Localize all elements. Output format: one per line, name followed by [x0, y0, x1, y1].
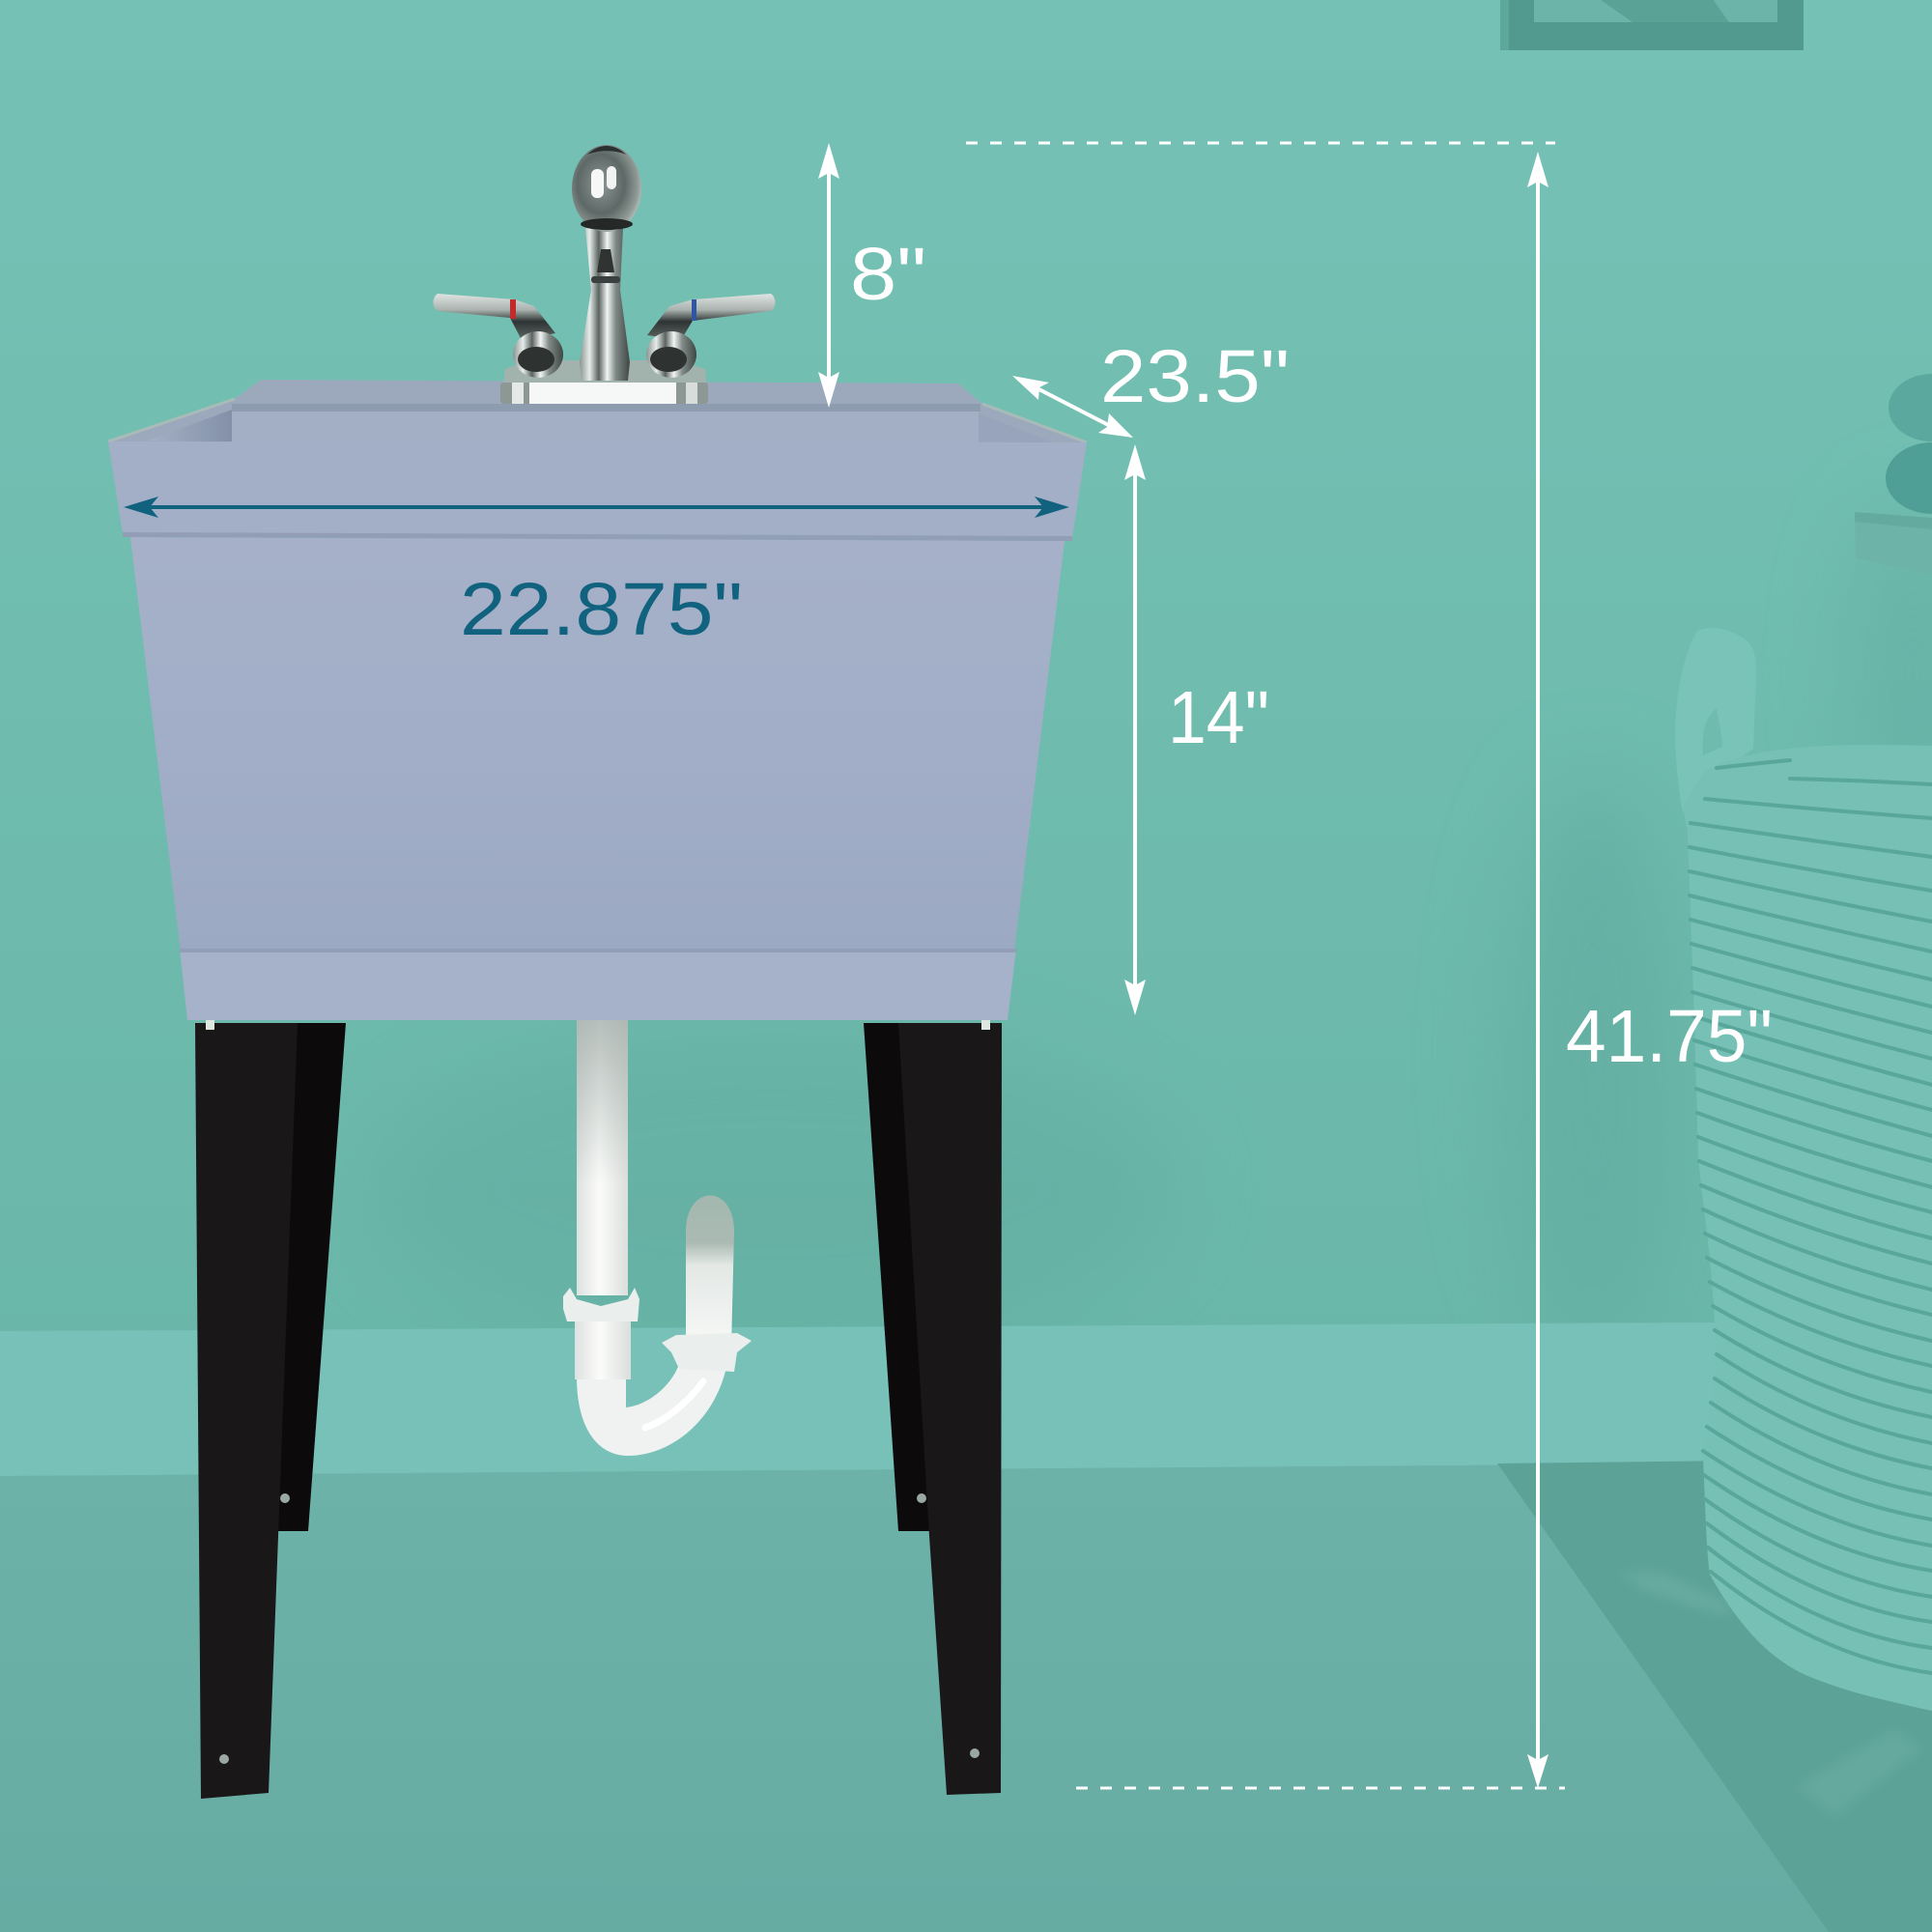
laundry hamper [1675, 628, 1932, 1711]
arrow: faucet height [818, 143, 839, 408]
sink legs [195, 1020, 1002, 1799]
label: depth front to back: 23.5" [1100, 335, 1290, 418]
floor [0, 1463, 1932, 1932]
right handle [646, 294, 775, 378]
sink tub [108, 380, 1087, 1020]
arrow: tub front to back [1012, 376, 1133, 438]
picture frame on wall [1500, 0, 1804, 50]
spout head [572, 145, 641, 283]
label: width: 22.875" [460, 568, 743, 651]
dashed guide: floor level [1076, 1787, 1565, 1789]
baseboard [0, 1322, 1719, 1476]
label: faucet height: 8" [850, 233, 926, 316]
back plate [500, 360, 708, 404]
lower sleeve [575, 1320, 631, 1379]
left handle [433, 294, 563, 378]
drain pipe [563, 1020, 752, 1456]
arrow: overall height [1527, 152, 1548, 1788]
bracket tabs [206, 1020, 990, 1030]
right back leg [864, 1023, 930, 1531]
wall background [0, 0, 1932, 1352]
rim top surface [108, 380, 1087, 442]
front rim [108, 441, 1087, 538]
bottom band [180, 949, 1016, 1020]
left front leg [195, 1023, 298, 1799]
label: overall height: 41.75" [1566, 995, 1773, 1078]
lower slip nut [662, 1333, 752, 1372]
hamper handle [1675, 628, 1756, 821]
left back leg [269, 1023, 346, 1531]
tub body [130, 537, 1065, 952]
trap bend [577, 1364, 726, 1456]
hamper stripes [1690, 760, 1932, 1673]
upper slip nut [563, 1288, 639, 1321]
faucet [433, 145, 775, 404]
stones and shelf [1855, 374, 1932, 575]
rug [1497, 1461, 1932, 1932]
bolt holes [219, 1493, 980, 1764]
center spout [580, 228, 630, 381]
label: basin depth: 14" [1168, 676, 1269, 759]
arrow: basin depth [1124, 444, 1146, 1015]
upper stub of trap [686, 1196, 734, 1348]
dashed guide: top of faucet [966, 141, 1555, 145]
front plate [500, 383, 708, 404]
right front leg [898, 1023, 1002, 1795]
hamper basket [1683, 745, 1932, 1711]
arrow: tub width [124, 497, 1069, 518]
basin interior [148, 404, 1053, 443]
vertical tailpiece [577, 1020, 628, 1295]
